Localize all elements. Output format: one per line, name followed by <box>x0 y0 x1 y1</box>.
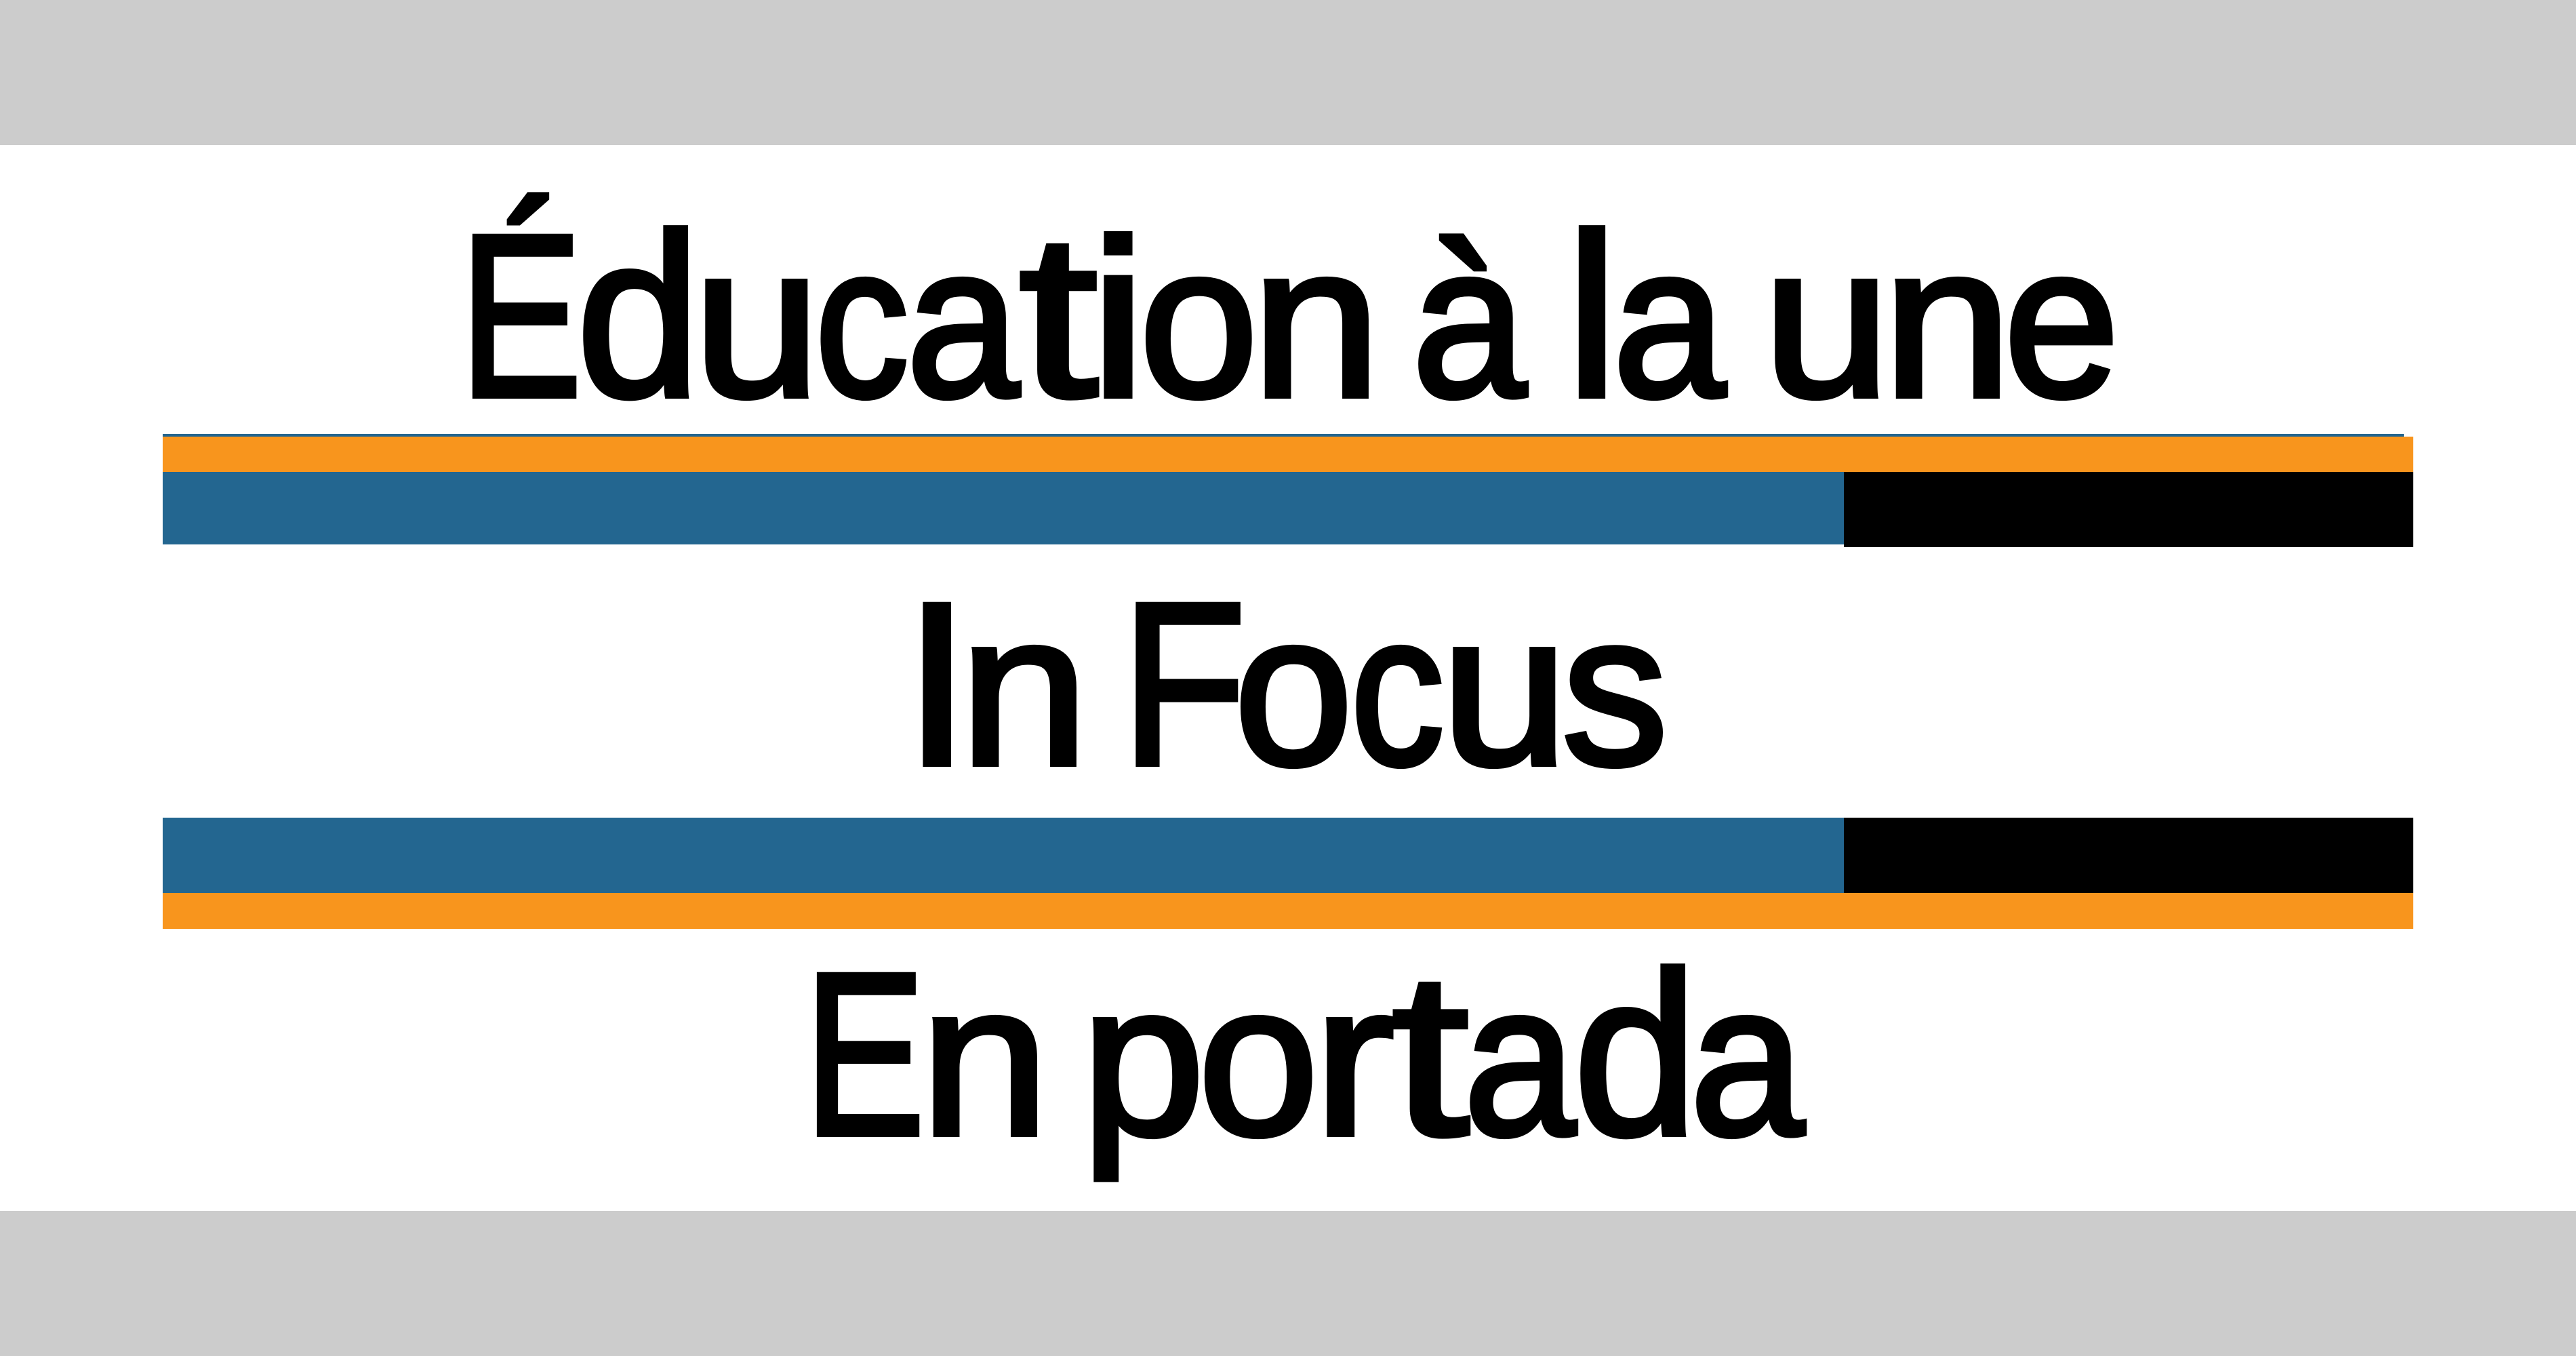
heading: Spanish: r <box>1313 938 1394 1180</box>
heading: French: t <box>1019 186 1099 445</box>
heading: English: I <box>904 555 971 814</box>
heading: Spanish: d <box>1573 925 1697 1184</box>
heading: English <box>904 555 1668 814</box>
heading: Spanish: o <box>1199 938 1319 1180</box>
heading: French: i <box>1090 193 1146 443</box>
upper rule: blue, orange and black bars <box>163 434 2413 547</box>
heading: French: e <box>2004 199 2119 442</box>
heading: English: F <box>1121 555 1246 814</box>
heading: English: o <box>1234 567 1353 810</box>
heading: French <box>460 186 2119 445</box>
heading: English: s <box>1562 567 1668 810</box>
heading: English: c <box>1350 567 1445 810</box>
heading: French: o <box>1140 199 1258 442</box>
heading: French: d <box>576 186 700 445</box>
heading: English: n <box>959 567 1089 810</box>
heading: French: n <box>1251 199 1381 442</box>
heading: French: c <box>815 199 909 442</box>
heading: French: a <box>906 199 1020 442</box>
heading: Spanish <box>804 925 1805 1184</box>
heading: Spanish: a <box>1464 938 1577 1180</box>
heading: Spanish: a <box>1690 938 1805 1180</box>
lower rule: blue, black and orange bars <box>163 818 2413 929</box>
heading: French: n <box>1883 199 2012 442</box>
heading: Spanish: E <box>804 925 925 1184</box>
heading: French: a <box>1613 199 1727 442</box>
heading: Spanish: t <box>1392 925 1470 1184</box>
heading: French: É <box>460 186 582 445</box>
heading: French: l <box>1565 186 1619 445</box>
top grey band <box>0 0 2576 145</box>
heading: Spanish: n <box>920 938 1049 1180</box>
bottom grey band <box>0 1211 2576 1356</box>
heading: French: à <box>1412 199 1527 442</box>
heading: English: u <box>1441 567 1569 810</box>
heading: Spanish: p <box>1081 938 1205 1182</box>
heading: French: u <box>693 199 820 442</box>
heading: French: u <box>1763 199 1890 442</box>
